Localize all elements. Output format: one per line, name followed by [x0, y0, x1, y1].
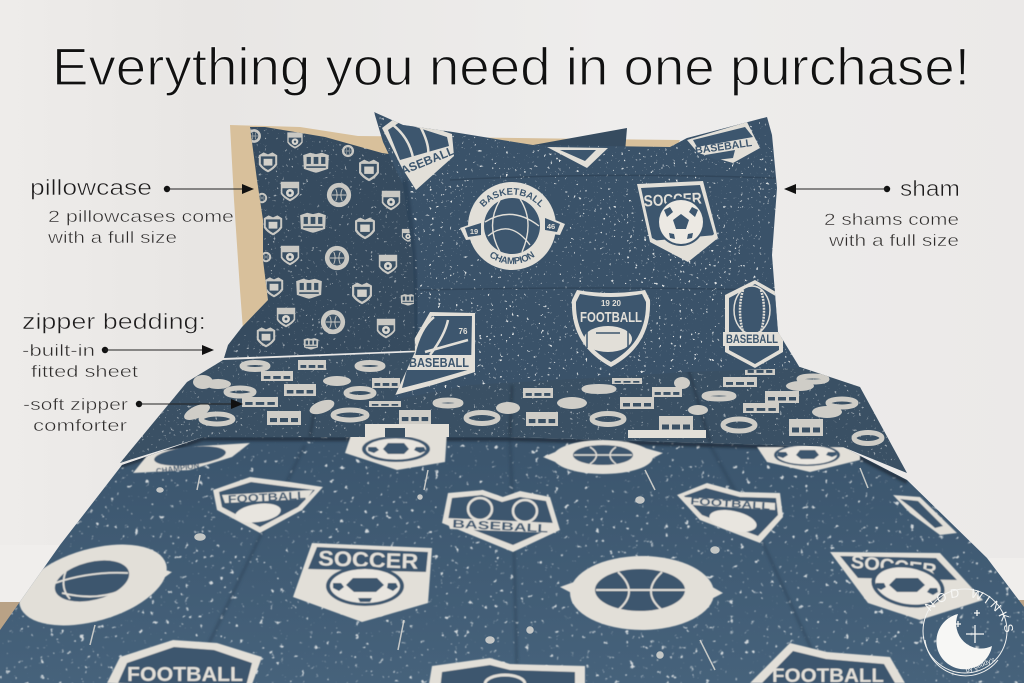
label: sham: 2 shams come: [824, 210, 959, 229]
sham badge: back pillow baseball: [547, 147, 608, 168]
sham badge: baseball top right: BASEBALL: [694, 137, 753, 157]
label: zipper bedding: -soft zipper: [23, 395, 128, 414]
badge: football bottom left: [107, 640, 262, 683]
baseboard and floor: [0, 545, 1024, 632]
label: pillowcase: pillowcase: [30, 175, 152, 200]
title: Everything you need in one purchase!: [52, 38, 970, 97]
badge: soccer upper: [345, 432, 447, 470]
label: zipper bedding: comforter: [33, 416, 127, 435]
quilting seams: [208, 442, 812, 664]
label: pillowcase: with a full size: [47, 228, 177, 247]
label: zipper bedding: fitted sheet: [31, 362, 138, 381]
sham badge: baseball lower left: BASEBALL: [409, 356, 469, 370]
sham badge: basketball: 19: [470, 227, 478, 236]
badge: football right: [677, 483, 783, 543]
badge: soccer upper right: [757, 444, 860, 472]
sham badge: baseball top left: [382, 116, 456, 190]
badge: soccer lower left: [293, 543, 432, 622]
badge: soccer lower left: SOCCER: [318, 547, 419, 574]
arrow: sham: [784, 184, 890, 194]
badge: soccer lower right: SOCCER: [850, 552, 937, 580]
label: zipper bedding: [22, 309, 206, 435]
pillowcase: [220, 120, 627, 365]
sham badge: soccer: [637, 181, 718, 262]
arrow: soft zipper comforter: [136, 399, 243, 409]
label: sham: sham: [900, 176, 960, 201]
label: pillowcase: [30, 175, 234, 247]
label: sham: [824, 176, 960, 250]
label: pillowcase: 2 pillowcases come: [48, 207, 234, 226]
badge: basketball lower centre: [560, 556, 723, 630]
comforter lower panel: [0, 430, 1024, 683]
badge: baseball far right: [893, 495, 957, 535]
badge: baseball bottom centre: [428, 658, 585, 683]
sham badge: baseball lower right: BASEBALL: [726, 334, 778, 346]
badge: football left: FOOTBALL: [228, 490, 306, 506]
label: zipper bedding: -built-in: [22, 341, 95, 360]
badge: baseball centre: BASEBALL: [452, 519, 548, 536]
badge: basketball upper centre: [543, 440, 663, 474]
badge: football bottom right: [750, 643, 905, 683]
badge: basketball upper left: [133, 443, 250, 476]
logo: Nod Winks: NOD WINKS: [924, 588, 1014, 632]
badge: soccer lower right: [830, 552, 983, 620]
arrow: built-in fitted sheet: [102, 345, 214, 355]
sham badge: basketball: BASKETBALL: [479, 188, 542, 208]
sham badge: football: 19 20: [601, 299, 622, 308]
sham badge: baseball lower left: 76: [459, 327, 468, 336]
sham: [374, 112, 800, 396]
sham badge: baseball top right: [687, 122, 760, 163]
logo: Nod Winks: [922, 588, 1014, 676]
sham badge: soccer: SOCCER: [643, 190, 703, 211]
badge: basketball lower left: [18, 544, 172, 626]
badge: football left: [213, 477, 323, 533]
sham badge: football: FOOTBALL: [580, 309, 642, 326]
badge: football right: FOOTBALL: [690, 496, 770, 513]
arrow: pillowcase: [164, 184, 254, 194]
comforter top fold: [120, 350, 910, 475]
label: sham: with a full size: [828, 231, 959, 250]
badge: baseball centre: [442, 490, 560, 552]
sham badge: baseball lower left: [395, 312, 475, 395]
logo: Nod Winks: by beddy's: [965, 656, 997, 675]
sham badge: baseball lower right: [723, 280, 783, 368]
label: zipper bedding: zipper bedding:: [22, 309, 206, 334]
sham badge: basketball: [460, 182, 565, 270]
sham badge: football: [572, 290, 650, 367]
sham badge: baseball top left: BASEBALL: [391, 144, 456, 181]
sham badge: basketball: 46: [547, 222, 555, 231]
badge: basketball upper left: CHAMPION: [155, 461, 200, 476]
sham badge: basketball: CHAMPION: [490, 251, 535, 264]
headboard: [230, 125, 680, 352]
splatter marks: [90, 468, 868, 670]
